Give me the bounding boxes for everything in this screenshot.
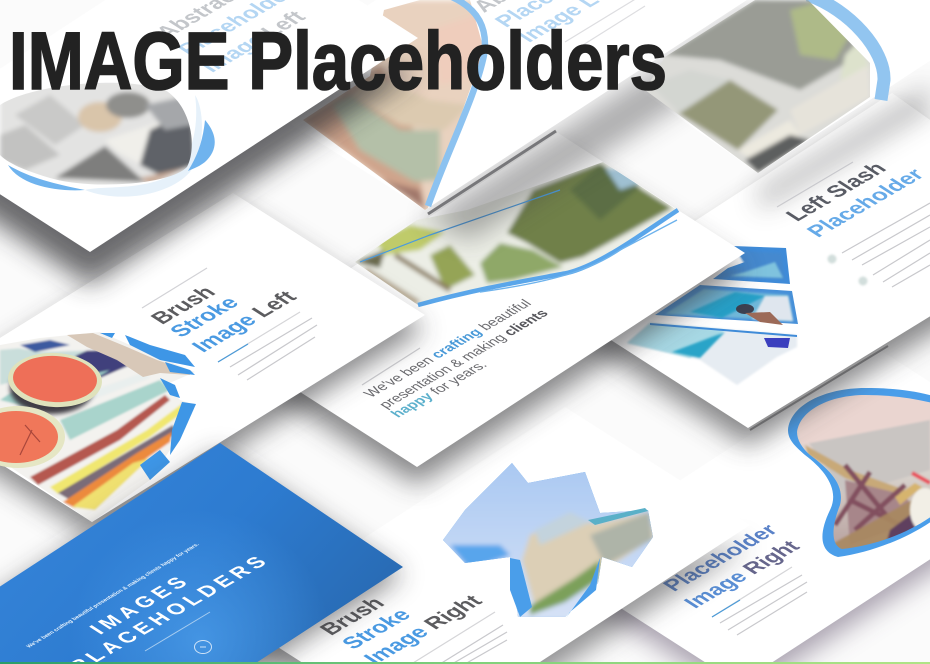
heading: Brush Stroke Image Right: Stroke [336, 605, 416, 653]
slide: top right van (photo) [640, 0, 884, 180]
statement text: We've been crafting beautiful [361, 297, 535, 400]
photo: three slanted surf bands [627, 246, 798, 385]
body text lines [413, 612, 507, 664]
slide: crafting statement [230, 133, 745, 485]
heading: Placeholder Image Right: Image Right [679, 537, 805, 612]
title: IMAGE Placeholders [9, 16, 667, 107]
tagline: We've been crafting beautiful presentation & making clients happy for years. [26, 542, 202, 649]
icon: pale blue blob outline [85, 95, 202, 197]
heading: Images Placeholders: IMAGES [85, 572, 196, 638]
photo: van under palm [646, 0, 870, 173]
icon: tan cloth stroke [67, 333, 190, 377]
slide: left slash placeholder [561, 93, 930, 446]
photo: palm and reeds in brush stroke [350, 160, 685, 310]
heading: Brush Stroke Image Right: Brush [314, 593, 390, 639]
heading: Left Slash Placeholder: Left Slash [780, 159, 892, 225]
photo: couple by window [0, 82, 192, 184]
slide: brush stroke image right [258, 463, 749, 662]
photo: watermelon on striped cloth [0, 328, 200, 528]
heading: Placeholder Image Right: Placeholder [658, 520, 784, 595]
slide: top left couple [0, 0, 418, 285]
icon: lower watermelon [0, 406, 65, 468]
photo: peach coastline [304, 0, 482, 210]
photo: city in brush stroke [440, 460, 660, 620]
heading: Brush Stroke Image Left: Stroke [164, 293, 244, 341]
icon: bullet dots [828, 254, 868, 286]
icon: circle arrow [194, 640, 212, 654]
photo: blob with jetty [788, 388, 930, 560]
body text lines [712, 567, 807, 635]
icon: blue brush flecks [100, 333, 196, 480]
slide: top right van (background) [600, 0, 930, 210]
statement text: presentation & making clients [376, 307, 552, 411]
heading: Brush Stroke Image Left: Brush [145, 282, 221, 328]
heading: Abstract Placeholder Image Left: Image Left [195, 7, 311, 76]
body text lines [142, 268, 317, 380]
heading: Brush Stroke Image Left: Image Left [186, 287, 302, 356]
body text lines [777, 162, 930, 287]
slide: brush stroke image left [0, 193, 425, 536]
heading: Left Slash Placeholder: Placeholder [801, 165, 930, 241]
icon: blue crescent bottom [8, 165, 85, 190]
icon: blue arc [428, 0, 485, 206]
icon: surfer [736, 304, 790, 348]
subtitle line [145, 612, 210, 651]
slide: blue cover [0, 443, 403, 664]
heading: Brush Stroke Image Left [145, 282, 302, 356]
overline [362, 348, 420, 385]
body text lines [565, 0, 645, 50]
heading: Abstract Placeholder Image Left [150, 0, 311, 76]
statement text: happy for years. [388, 359, 491, 420]
bottom green strip [0, 662, 930, 664]
icon: upper watermelon [7, 351, 103, 414]
slide: placeholder image right [601, 388, 930, 662]
icon: blue crescent right [188, 120, 215, 171]
icon: blue arc [808, 0, 884, 100]
slide: top centre peach [304, 0, 754, 250]
